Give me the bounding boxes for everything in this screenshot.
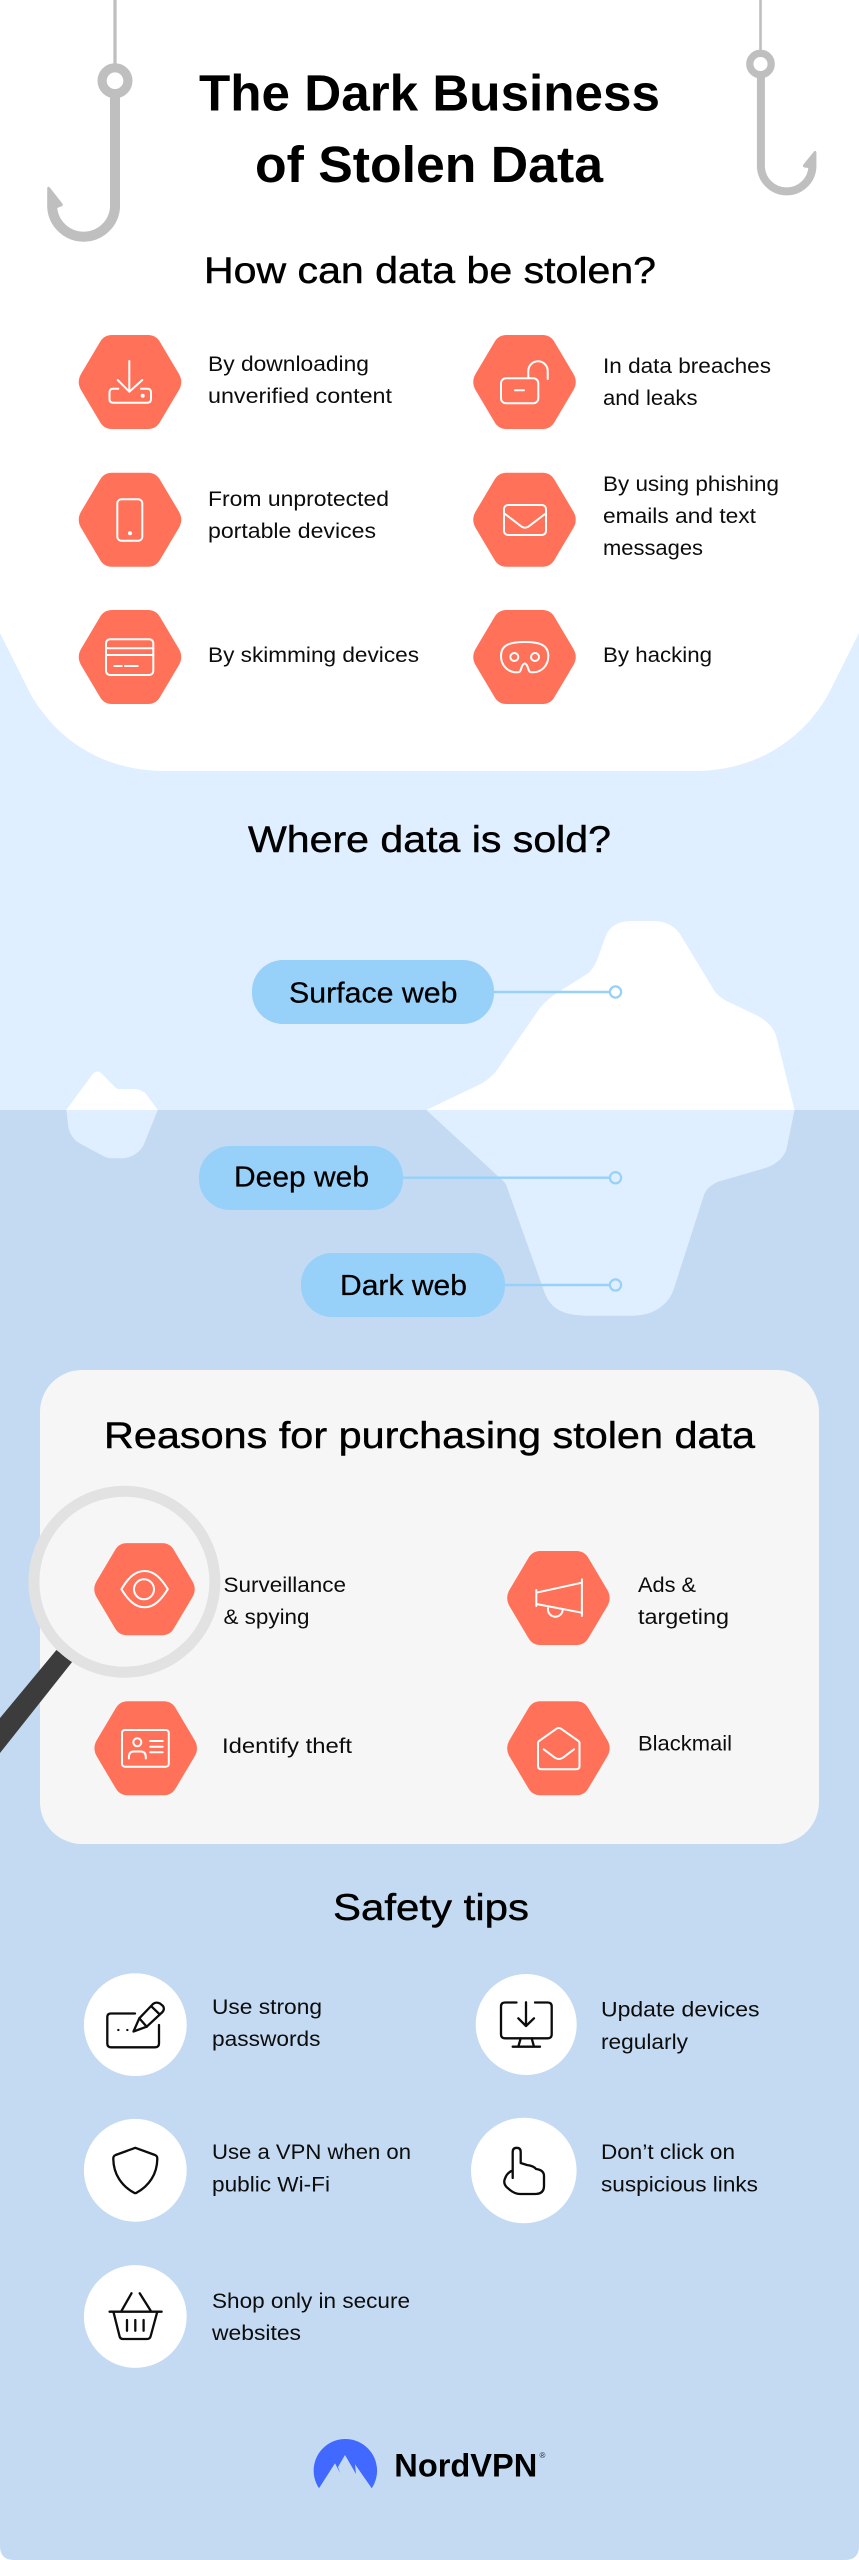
tip: strong passwords [84,1973,322,2076]
item: identity theft [94,1701,352,1795]
item: downloading unverified content: By downloading [208,353,369,376]
title [199,65,660,193]
label: surface web: Surface web [289,978,458,1010]
item: blackmail: Blackmail [638,1733,732,1756]
item: surveillance and spying [94,1543,346,1635]
item: ads and targeting: targeting [638,1606,729,1629]
title: The Dark Business [199,65,660,122]
tip: update devices: regularly [601,2031,689,2054]
item: phishing emails and text messages: messages [603,537,703,560]
item: ads and targeting [507,1551,729,1645]
tip: secure shopping: websites [211,2322,301,2345]
heading: reasons: Reasons for purchasing stolen data [104,1415,755,1456]
item: blackmail [507,1701,732,1795]
tip: suspicious links [471,2118,758,2223]
item: surveillance and spying: Surveillance [224,1574,346,1597]
item: data breaches and leaks: In data breaches [603,355,771,378]
item: downloading unverified content [79,335,392,429]
item: unprotected portable devices: From unprotected [208,488,389,511]
tip: secure shopping [84,2265,410,2368]
label: deep web [199,1146,621,1210]
heading: where data is sold: Where data is sold? [248,819,611,860]
small iceberg [66,1072,158,1158]
iceberg chart: web layers [66,921,795,1317]
heading: how can data be stolen: How can data be stolen? [204,250,656,291]
icon: right fish hook [750,0,816,191]
item: surveillance and spying: & spying [224,1606,310,1629]
item: ads and targeting: Ads & [638,1574,696,1597]
panel: how data can be stolen [0,0,859,771]
section: safety tips [84,1887,759,2368]
logo: NordVPN: NordVPN [394,2448,537,2484]
tip: use a vpn: public Wi-Fi [212,2174,330,2197]
tip: update devices [476,1974,760,2075]
label: dark web [301,1253,621,1317]
item: downloading unverified content: unverified content [208,385,392,408]
icon: left fish hook [47,0,128,237]
tip: suspicious links: Don’t click on [601,2141,735,2164]
icon: magnifying glass [0,1491,215,1753]
title: of Stolen Data [255,136,604,193]
tip: strong passwords: passwords [212,2028,320,2051]
item: data breaches and leaks [473,335,771,429]
item: identity theft: Identify theft [222,1735,352,1758]
item: phishing emails and text messages: By using phishing [603,473,779,496]
label: dark web: Dark web [340,1270,467,1302]
label: deep web: Deep web [234,1162,369,1194]
tip: update devices: Update devices [601,1999,760,2022]
item: data breaches and leaks: and leaks [603,387,698,410]
logo: NordVPN [314,2439,546,2488]
item: phishing emails and text messages [473,473,779,567]
large iceberg [426,921,794,1316]
tip: strong passwords: Use strong [212,1996,322,2019]
panel: reasons for purchasing stolen data [0,1370,819,1844]
tip: use a vpn: Use a VPN when on [212,2141,411,2164]
tip: use a vpn [84,2119,411,2222]
item: unprotected portable devices [79,473,389,567]
item: phishing emails and text messages: emails and text [603,505,756,528]
tip: secure shopping: Shop only in secure [212,2290,410,2313]
tip: suspicious links: suspicious links [601,2174,758,2197]
item: hacking [473,610,712,704]
item: hacking: By hacking [603,644,712,667]
item: skimming devices: By skimming devices [208,644,419,667]
logo: NordVPN: ® [540,2451,546,2460]
label: surface web [252,960,621,1024]
item: skimming devices [79,610,419,704]
item: unprotected portable devices: portable devices [208,520,376,543]
heading: safety tips: Safety tips [333,1887,529,1928]
